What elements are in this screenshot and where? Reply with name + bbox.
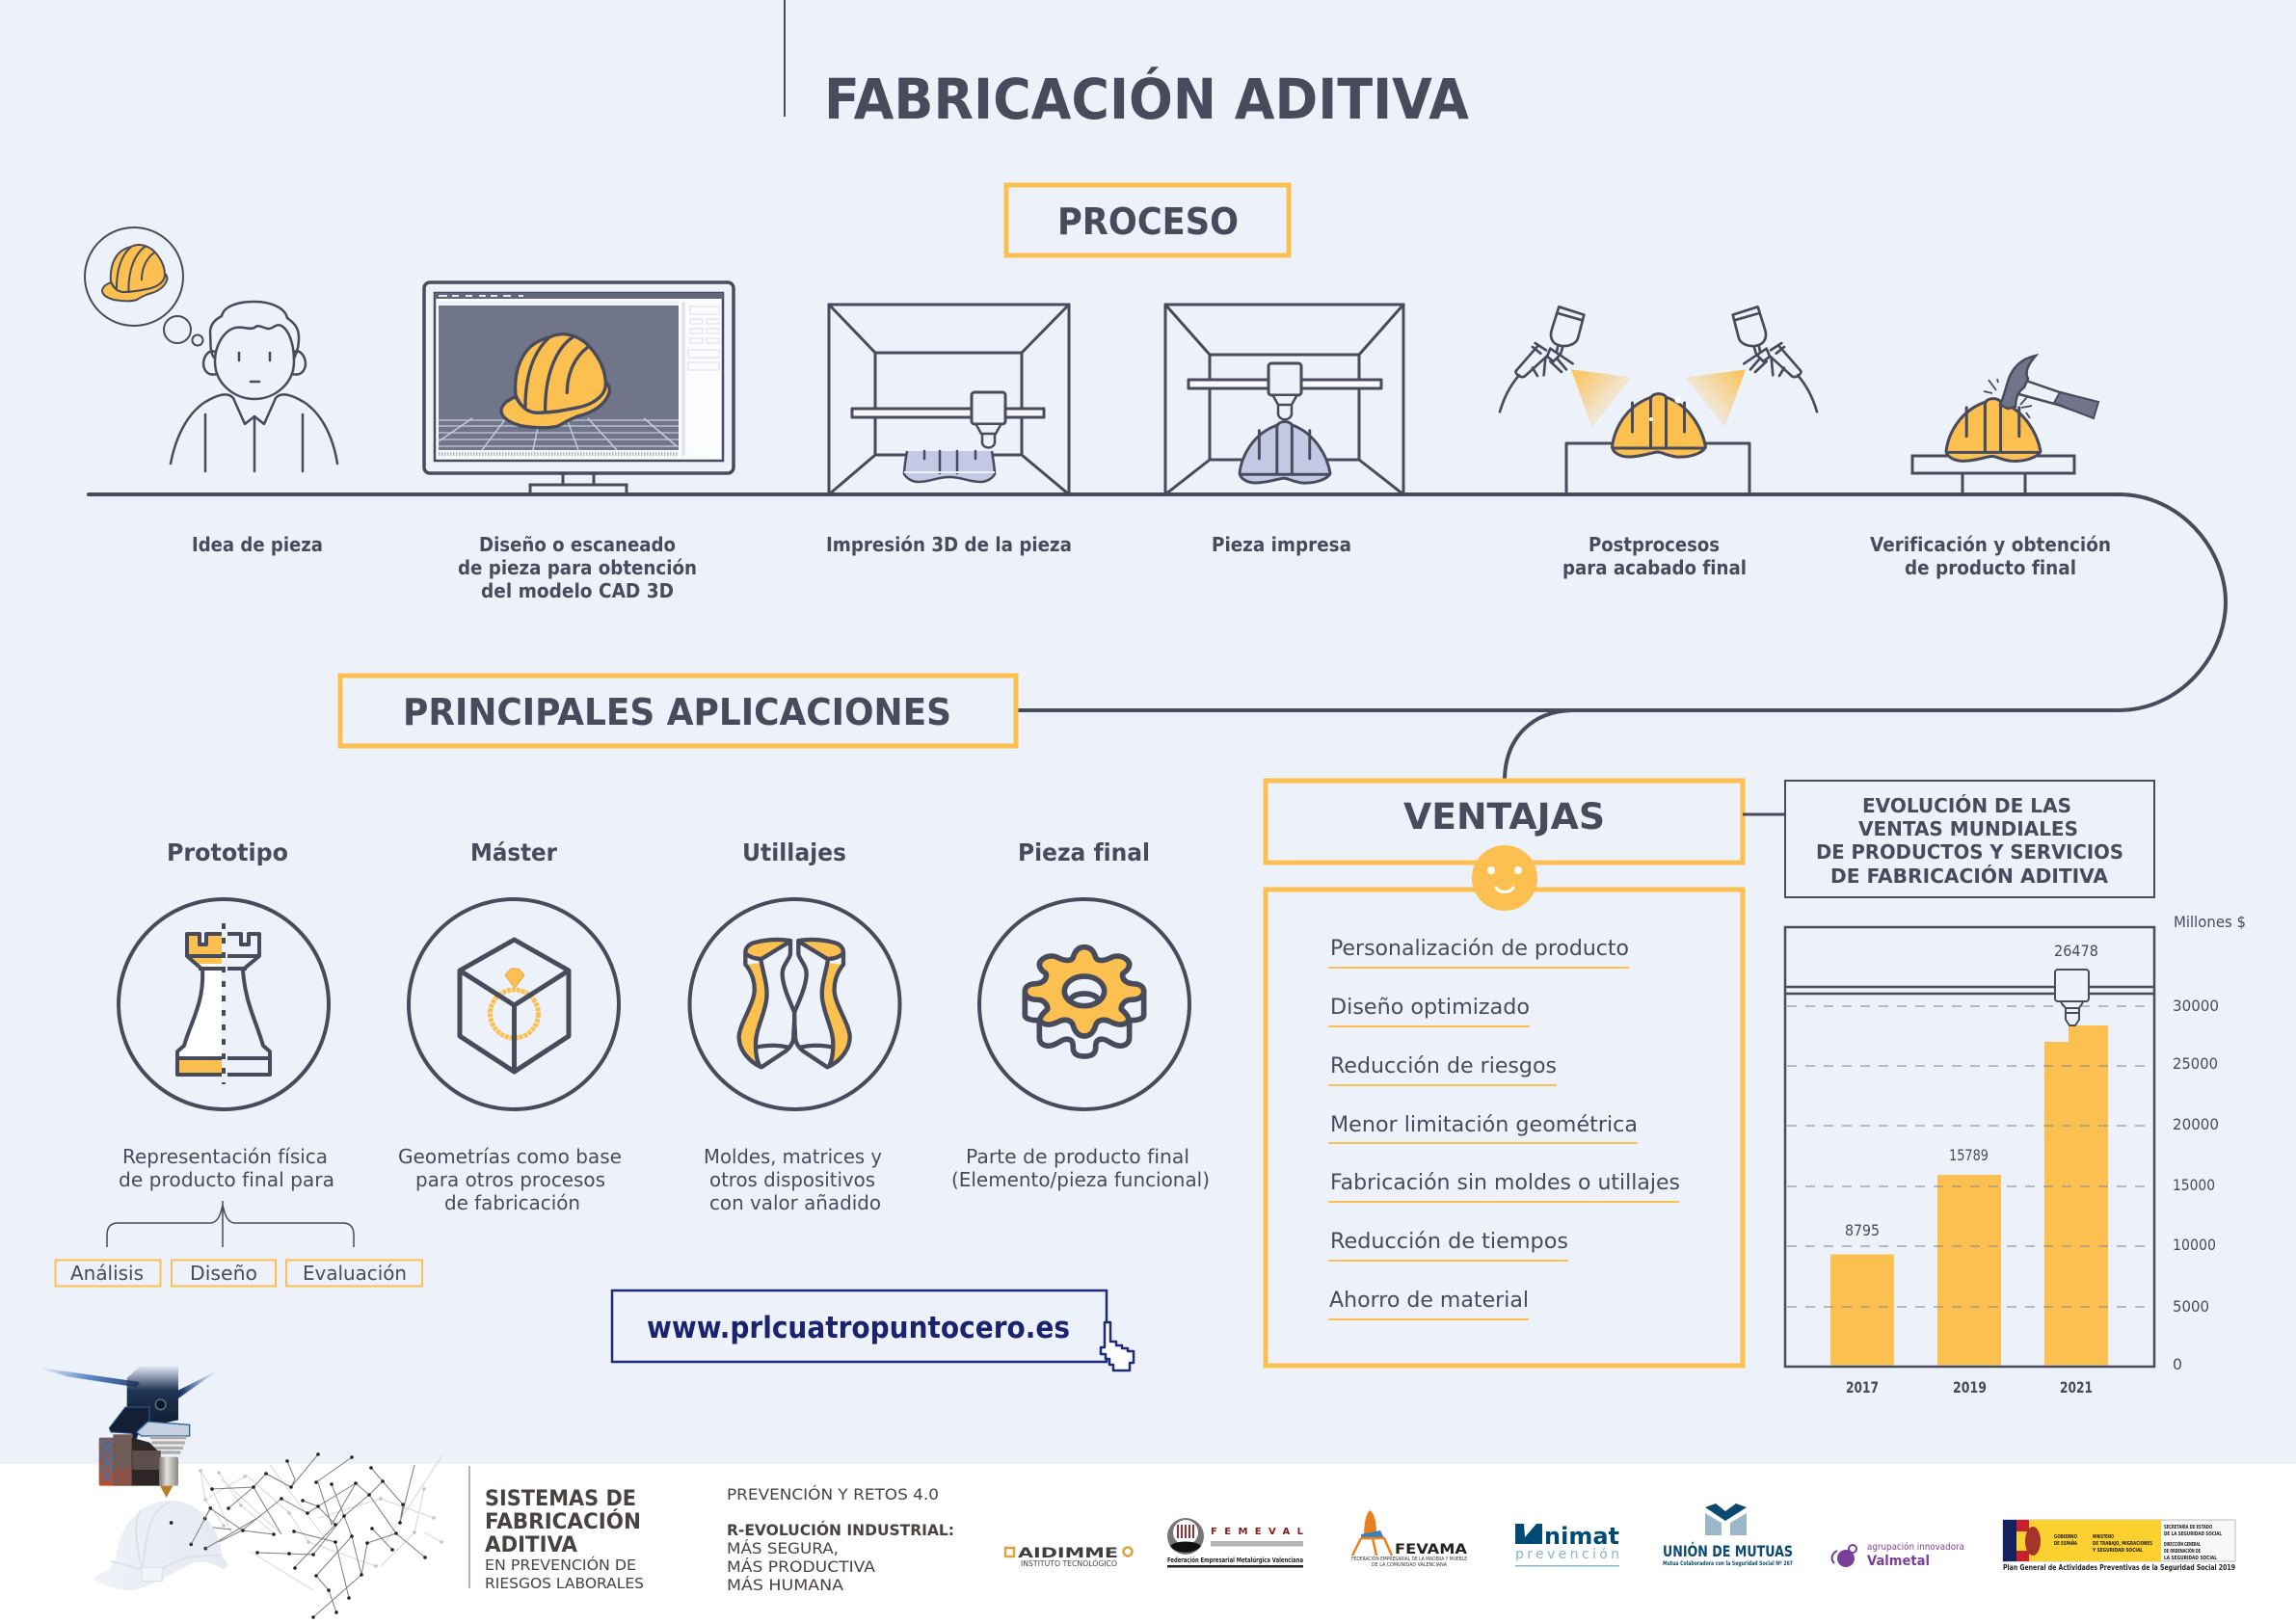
footer title — [485, 1487, 644, 1592]
label: postprocesos: para acabado final — [1562, 556, 1747, 579]
bars — [1830, 1025, 2108, 1365]
axis labels: 10000 — [2173, 1236, 2216, 1254]
footer background — [0, 1464, 2296, 1623]
logo: gobierno de españa: DE ESPAÑA — [2054, 1540, 2077, 1547]
text: pieza final description: Parte de producto final — [966, 1145, 1189, 1168]
text: máster description: para otros procesos — [415, 1168, 605, 1191]
heading: prototipo: Prototipo — [167, 838, 288, 866]
text: máster description: Geometrías como base — [398, 1145, 622, 1168]
text: prototipo description — [119, 1145, 334, 1191]
footer program text: MÁS PRODUCTIVA — [727, 1557, 875, 1576]
footer divider — [468, 1466, 470, 1588]
heading: utillajes: Utillajes — [742, 838, 846, 866]
logo: aidimme: INSTITUTO TECNOLÓGICO — [1021, 1557, 1117, 1568]
step: idea de pieza — [85, 227, 337, 556]
logo: unimat: nimat — [1544, 1523, 1619, 1550]
bar values: 8795 — [1845, 1221, 1880, 1239]
tag: evaluación — [286, 1261, 422, 1286]
icon: person — [171, 302, 337, 471]
step: impresión 3D — [826, 305, 1072, 556]
panel: pieza final — [951, 838, 1210, 1191]
bar values: 15789 — [1949, 1146, 1989, 1164]
icon: moulds — [690, 899, 900, 1109]
logo: gobierno de españa: DE ORDENACIÓN DE — [2164, 1548, 2201, 1555]
text: utillajes description: otros dispositivos — [709, 1168, 875, 1191]
connector to chart — [1743, 813, 1785, 815]
step: diseño CAD — [424, 282, 734, 602]
text: utillajes description: con valor añadido — [709, 1191, 881, 1214]
logo: fevama: FEVAMA — [1395, 1542, 1467, 1557]
icon: smiley — [1472, 845, 1537, 911]
label: diseño o escaneado: de pieza para obtención — [458, 556, 697, 579]
text: prototipo description: Representación física — [122, 1145, 328, 1168]
list: advantages: Reducción de tiempos — [1330, 1230, 1568, 1254]
text: pieza final description — [951, 1145, 1210, 1191]
logo: valmetal: agrupación innovadora — [1867, 1541, 1964, 1553]
tag: diseño — [172, 1261, 276, 1286]
text: prototipo description: de producto final para — [119, 1168, 334, 1191]
logo: unión de mutuas — [1663, 1503, 1793, 1567]
logo: gobierno de españa: LA SEGURIDAD SOCIAL — [2164, 1556, 2218, 1561]
logo: valmetal — [1832, 1541, 1964, 1569]
icon: print head — [2055, 970, 2089, 1025]
footer program text: PREVENCIÓN Y RETOS 4.0 — [727, 1485, 939, 1503]
axis labels: 15000 — [2173, 1176, 2215, 1194]
print head machine — [36, 1366, 219, 1498]
icon: 3D printer printing — [829, 305, 1069, 494]
axis labels: 30000 — [2173, 997, 2219, 1015]
label: diseño o escaneado — [458, 533, 697, 602]
footer program text: MÁS HUMANA — [727, 1576, 843, 1594]
heading: proceso — [1006, 185, 1289, 255]
label: postprocesos: Postprocesos — [1589, 533, 1720, 556]
tag: diseño: Diseño — [190, 1262, 257, 1285]
label: postprocesos — [1562, 533, 1747, 579]
network lines — [172, 1452, 443, 1619]
icon: thought bubble with helmet — [85, 227, 202, 345]
grid lines — [1787, 1006, 2152, 1307]
list: advantages: Reducción de riesgos — [1330, 1054, 1557, 1078]
logo: gobierno de españa: DIRECCIÓN GENERAL — [2164, 1541, 2202, 1548]
axis labels: 20000 — [2173, 1115, 2219, 1133]
footer title: SISTEMAS DE — [485, 1487, 636, 1511]
logo: fevama: FEDERACIÓN EMPRESARIAL DE LA MADERA Y MUEBLE — [1351, 1556, 1467, 1562]
panel: utillajes — [690, 838, 900, 1214]
logo: aidimme: AIDIMME — [1018, 1546, 1118, 1561]
bracket — [107, 1201, 354, 1247]
panel: ventajas — [1266, 781, 1743, 1366]
year labels: 2021 — [2060, 1378, 2093, 1397]
footer program text: R-EVOLUCIÓN INDUSTRIAL: — [727, 1521, 954, 1539]
icon: 3D printer finished — [1165, 305, 1403, 494]
white helmet — [94, 1501, 260, 1590]
bar values: 26478 — [2054, 942, 2098, 960]
bar values — [1845, 942, 2098, 1239]
step: verificación — [1870, 356, 2111, 579]
tag: análisis — [56, 1261, 160, 1286]
list: advantages: Personalización de producto — [1330, 937, 1629, 961]
text: utillajes description — [704, 1145, 882, 1214]
footer program text: MÁS SEGURA, — [727, 1539, 839, 1557]
step: postprocesos — [1500, 306, 1817, 579]
text: máster description: de fabricación — [444, 1191, 580, 1214]
list: advantages — [1328, 937, 1680, 1319]
axis labels: Millones $ — [2174, 913, 2246, 931]
logo: gobierno de españa: SECRETARÍA DE ESTADO — [2164, 1523, 2212, 1530]
icon: hammer testing helmet — [1912, 356, 2098, 494]
text: máster description — [398, 1145, 622, 1214]
chart title box — [1785, 781, 2154, 897]
logo: unimat — [1515, 1523, 1619, 1567]
timeline connector — [89, 494, 2226, 779]
logo: unión de mutuas: UNIÓN DE MUTUAS — [1663, 1542, 1793, 1560]
heading: pieza final: Pieza final — [1018, 838, 1150, 866]
list: advantages: Diseño optimizado — [1330, 996, 1530, 1020]
logo: gobierno de españa: DE TRABAJO, MIGRACIONES — [2093, 1541, 2152, 1547]
year labels: 2019 — [1953, 1378, 1987, 1397]
list: advantages: Fabricación sin moldes o utillajes — [1330, 1171, 1680, 1195]
axis labels — [2173, 913, 2246, 1373]
icon: hand cursor — [1101, 1322, 1134, 1370]
label: impresión 3D: Impresión 3D de la pieza — [826, 533, 1072, 556]
logo: fevama: DE LA COMUNIDAD VALENCIANA — [1372, 1562, 1448, 1568]
tag: evaluación: Evaluación — [303, 1262, 407, 1285]
bar chart — [1785, 913, 2246, 1397]
panel: prototipo — [56, 838, 422, 1286]
url button: www.prlcuatropuntocero.es — [647, 1311, 1070, 1345]
chart title box: DE FABRICACIÓN ADITIVA — [1830, 865, 2109, 888]
chart title box: DE PRODUCTOS Y SERVICIOS — [1816, 840, 2123, 864]
label: pieza impresa: Pieza impresa — [1212, 533, 1351, 556]
panel: máster — [398, 838, 622, 1214]
chart title box: VENTAS MUNDIALES — [1858, 817, 2078, 840]
year labels — [1846, 1378, 2093, 1397]
footer title: FABRICACIÓN — [485, 1509, 641, 1534]
footer program text — [727, 1485, 954, 1594]
text: pieza final description: (Elemento/pieza funcional) — [951, 1168, 1210, 1191]
logo: aidimme — [1005, 1546, 1132, 1568]
logo: femeval: FEMEVAL — [1211, 1527, 1304, 1537]
logo: femeval — [1167, 1518, 1304, 1567]
logo: gobierno de españa — [2003, 1520, 2235, 1572]
label: diseño o escaneado: del modelo CAD 3D — [481, 579, 674, 602]
axis labels: 25000 — [2173, 1054, 2218, 1073]
list: advantages: Menor limitación geométrica — [1330, 1113, 1638, 1137]
logo: gobierno de españa: Y SEGURIDAD SOCIAL — [2092, 1548, 2144, 1554]
title rule — [784, 0, 786, 117]
url button — [612, 1290, 1134, 1370]
label: verificación: de producto final — [1905, 556, 2076, 579]
white helmet and print head machine — [36, 1366, 260, 1590]
footer title: EN PREVENCIÓN DE — [485, 1556, 636, 1574]
photo: print head, helmet and network — [36, 1366, 443, 1619]
footer title: ADITIVA — [485, 1533, 577, 1557]
icon: spray guns painting helmet — [1500, 306, 1817, 494]
logo: gobierno de españa: MINISTERIO — [2093, 1534, 2114, 1540]
logo: gobierno de españa: GOBIERNO — [2054, 1534, 2077, 1540]
axis labels: 5000 — [2173, 1297, 2209, 1316]
icon: cube with ring — [409, 899, 619, 1109]
icon: gear — [979, 899, 1189, 1109]
heading: proceso: PROCESO — [1057, 200, 1239, 243]
heading: principales aplicaciones: PRINCIPALES APLICACIONES — [403, 691, 951, 733]
chart title box: EVOLUCIÓN DE LAS — [1862, 794, 2071, 817]
label: idea de pieza: Idea de pieza — [192, 533, 323, 556]
logo: fevama — [1351, 1510, 1467, 1568]
chart frame with printer rail — [1785, 927, 2154, 1367]
heading: ventajas — [1266, 781, 1743, 863]
icon: computer monitor — [424, 282, 734, 494]
logo: gobierno de españa: DE LA SEGURIDAD SOCIAL — [2164, 1531, 2223, 1537]
label: diseño o escaneado: Diseño o escaneado — [479, 533, 676, 556]
heading: ventajas: VENTAJAS — [1403, 796, 1605, 838]
heading: máster: Máster — [470, 838, 558, 866]
logo: unimat: prevención — [1515, 1547, 1619, 1562]
heading: principales aplicaciones — [340, 676, 1016, 746]
label: verificación — [1870, 533, 2111, 579]
tag: análisis: Análisis — [70, 1262, 144, 1285]
axis labels: 0 — [2173, 1355, 2182, 1373]
text: utillajes description: Moldes, matrices y — [704, 1145, 882, 1168]
icon: rook in circle — [119, 899, 329, 1109]
step: pieza impresa — [1165, 305, 1403, 556]
year labels: 2017 — [1846, 1378, 1879, 1397]
label: verificación: Verificación y obtención — [1870, 533, 2111, 556]
footer title: RIESGOS LABORALES — [485, 1575, 644, 1592]
list: advantages: Ahorro de material — [1329, 1289, 1529, 1313]
logo: femeval: Federación Empresarial Metalúrgica Valenciana — [1167, 1556, 1303, 1564]
logo: valmetal: Valmetal — [1867, 1554, 1930, 1569]
logo: gobierno de españa: Plan General de Actividades Preventivas de la Seguridad Social 2019 — [2003, 1563, 2235, 1572]
list box — [1266, 890, 1743, 1366]
logo: unión de mutuas: Mutua Colaboradora con la Seguridad Social Nº 267 — [1663, 1560, 1793, 1567]
title: FABRICACIÓN ADITIVA — [824, 66, 1469, 132]
